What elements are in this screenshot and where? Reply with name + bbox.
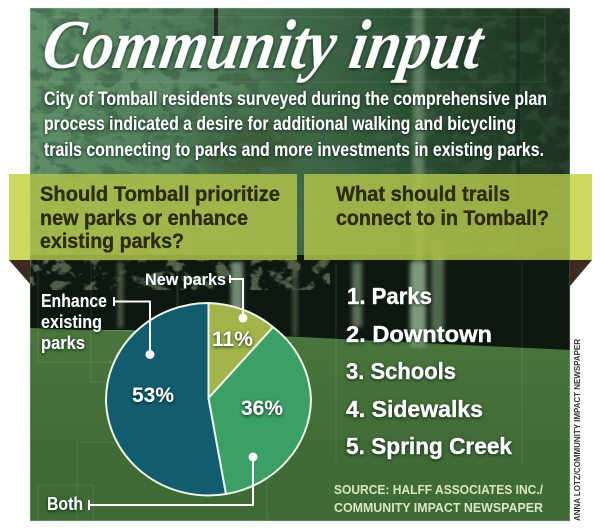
callout: enhance existing parks: existing [41,312,102,332]
percent labels: 11% [212,328,253,351]
callout: enhance existing parks [41,291,154,359]
pie chart [106,303,311,495]
ranked list of trail connections: 2. Downtown [346,321,492,347]
question: trails connect: connect to in Tomball? [336,207,549,230]
callout: enhance existing parks: Enhance [41,291,107,311]
question: trails connect: What should trails [336,183,510,206]
photo credit: ANNA LOTZ/COMMUNITY IMPACT NEWSPAPER [573,339,582,521]
question: prioritize parks: Should Tomball prioritize [40,183,280,206]
question: prioritize parks: new parks or enhance [40,207,248,230]
percent labels [132,328,283,420]
source note: SOURCE: HALFF ASSOCIATES INC./ [334,482,543,497]
ranked list of trail connections: 4. Sidewalks [346,396,483,422]
source note: COMMUNITY IMPACT NEWSPAPER [334,500,544,515]
question band: right [304,174,592,260]
slice: enhance existing parks 53% [106,303,226,495]
ranked list of trail connections: 1. Parks [347,283,432,309]
slice: both 36% [208,327,311,494]
callout: new parks [145,270,248,322]
callout: both [47,452,258,514]
ranked list of trail connections: 5. Spring Creek [346,433,512,459]
callout: enhance existing parks: parks [41,333,85,353]
ranked list of trail connections: 3. Schools [346,358,456,384]
percent labels: 36% [241,397,283,420]
band fold: left dark triangle [9,260,30,284]
percent labels: 53% [132,384,174,407]
slice: new parks 11% [208,303,273,398]
callout: both: Both [47,494,83,514]
question: prioritize parks: existing parks? [40,230,184,253]
band fold: right dark triangle [570,260,592,286]
title: Community input [37,6,491,84]
question band: left [9,174,297,260]
ranked list of trail connections [346,283,512,459]
intro text: process indicated a desire for additional walking and bicycling [44,114,516,135]
callout: new parks: New parks [145,270,226,289]
intro text [44,89,547,161]
